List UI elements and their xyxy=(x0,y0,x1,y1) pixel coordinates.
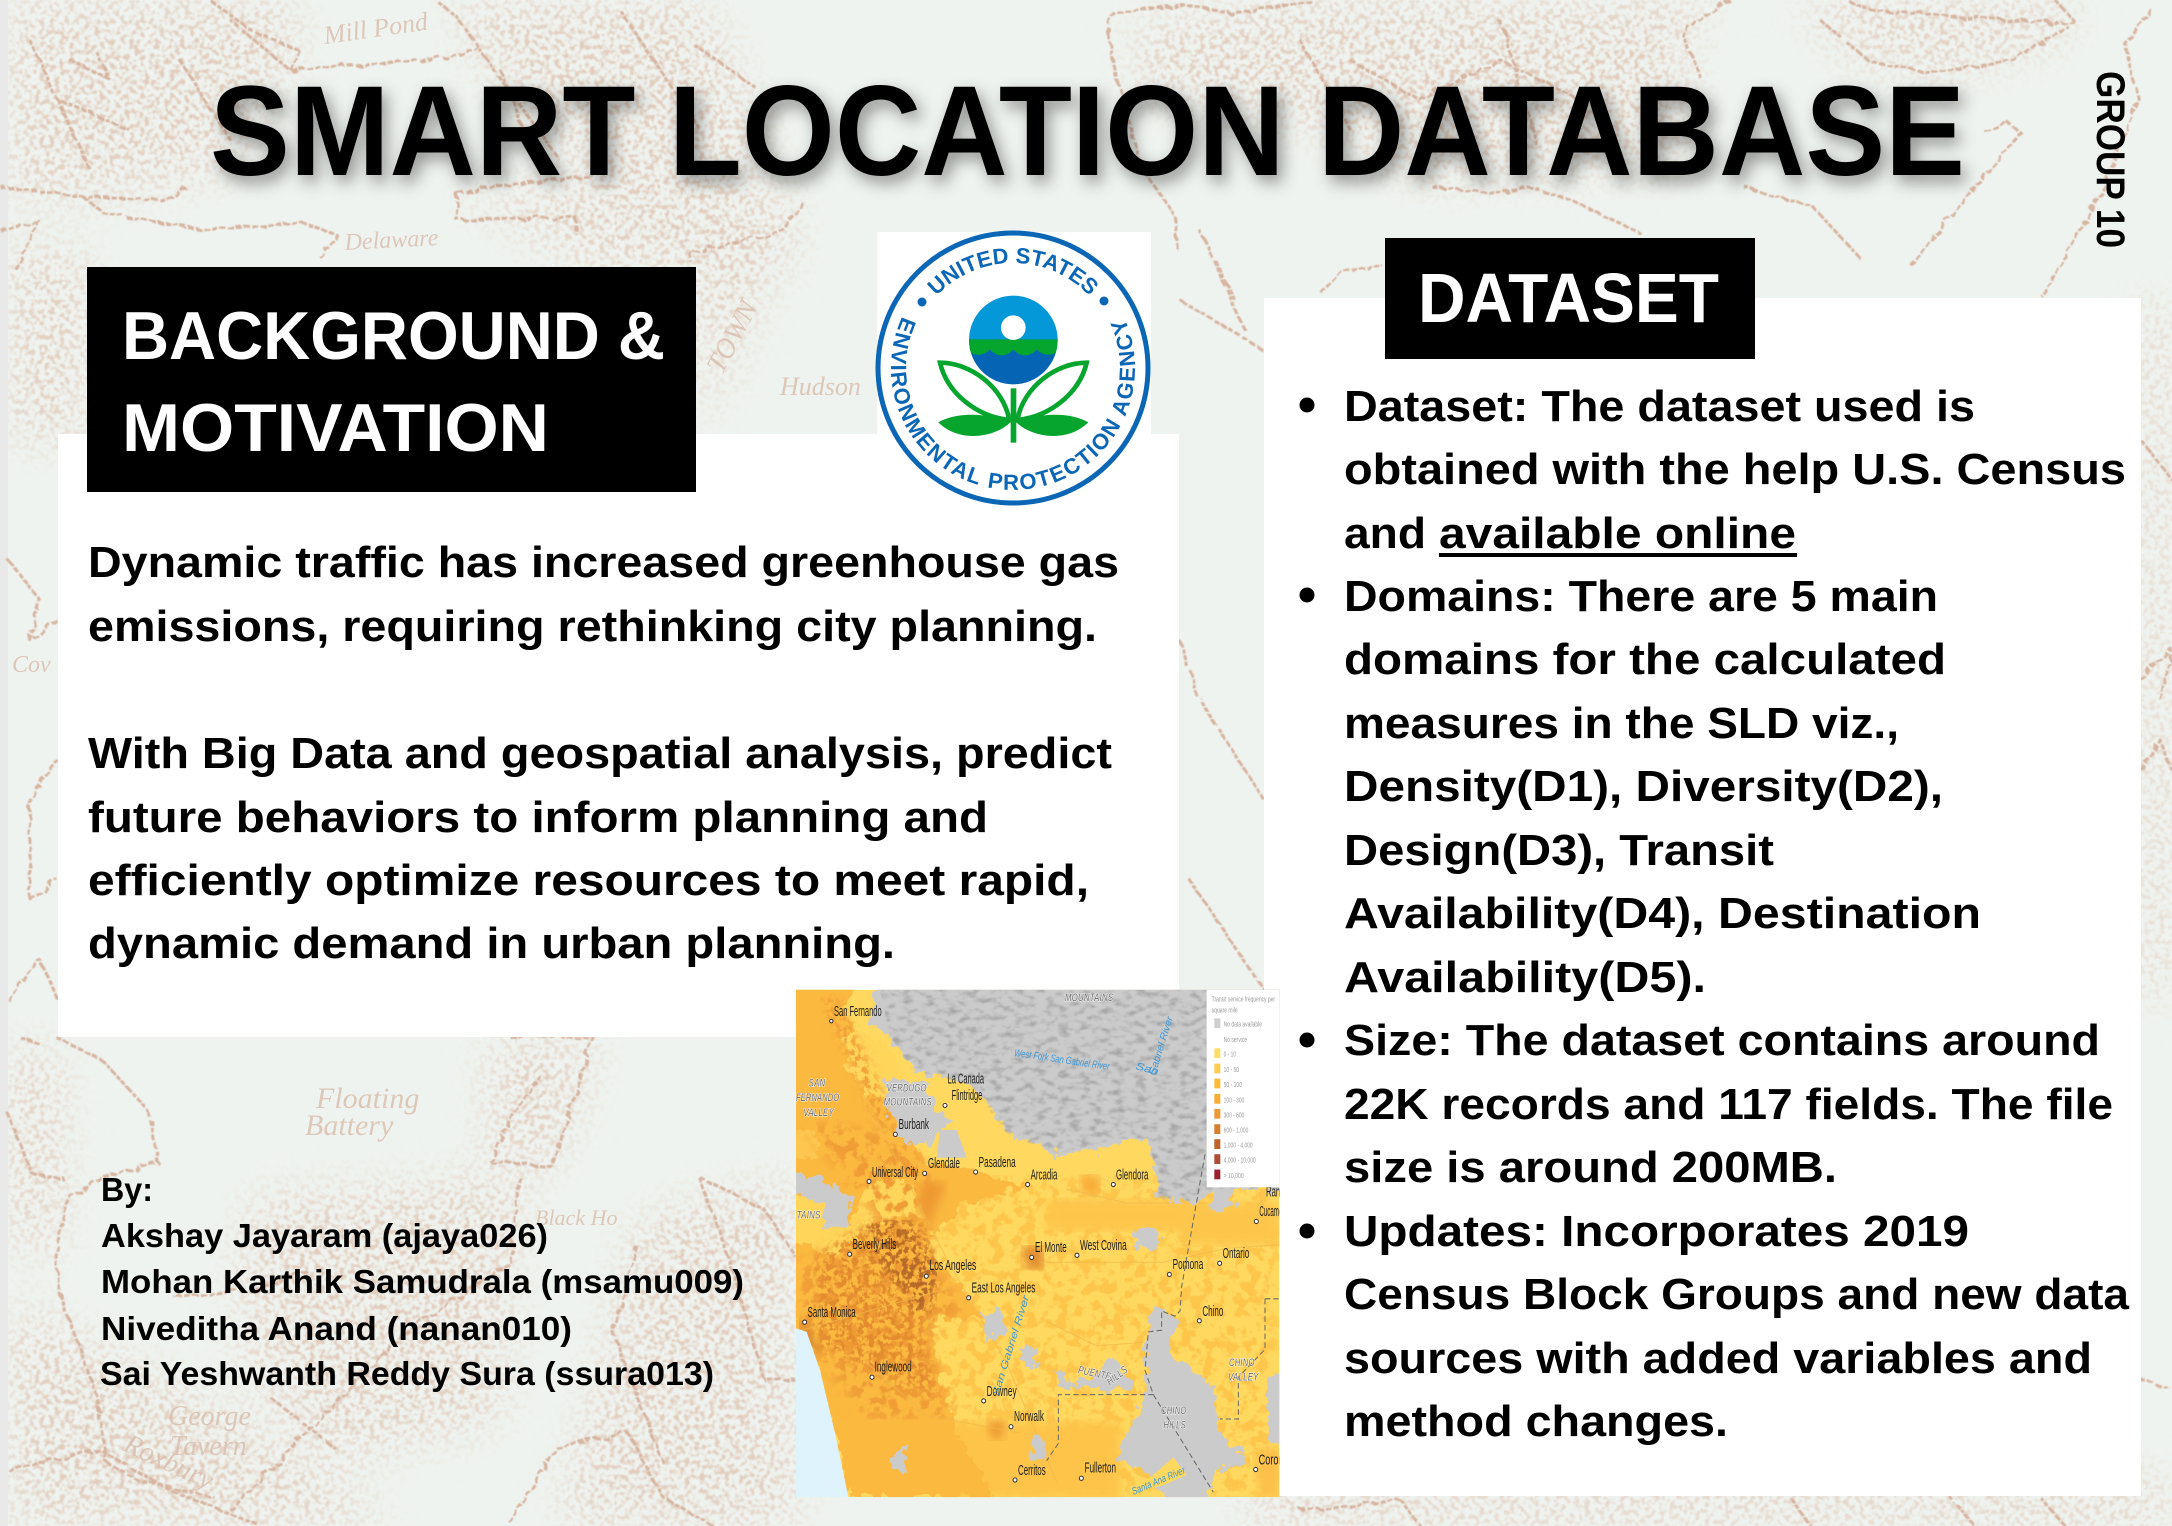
city markers and labels: Norwalk xyxy=(1014,1409,1044,1425)
city markers and labels: Cerritos xyxy=(1018,1463,1046,1479)
text block: background and motivation: efficiently optimize resources to meet rapid, xyxy=(88,856,1089,905)
region labels xyxy=(796,992,1259,1498)
map: transit service frequency in Los Angeles area xyxy=(790,983,1293,1503)
map legend: 4,000 - 10,000 xyxy=(1224,1156,1256,1165)
region labels: CHINO xyxy=(1161,1405,1187,1417)
map legend: Transit service frequency per xyxy=(1212,995,1275,1004)
map legend: 600 - 1,000 xyxy=(1224,1126,1248,1135)
city markers and labels: Arcadia xyxy=(1031,1167,1057,1184)
background: antique map texture: Hudson xyxy=(779,372,861,401)
heading: background and motivation xyxy=(87,267,696,492)
bullet: domains: measures in the SLD viz., xyxy=(1344,699,1899,748)
group label: GROUP 10 xyxy=(2088,71,2132,248)
bullet: dataset source: obtained with the help U.S. Census xyxy=(1344,445,2126,494)
bullet: updates xyxy=(1300,1207,2130,1446)
text block: background and motivation: dynamic demand in urban planning. xyxy=(88,919,895,968)
bullet: domains xyxy=(1300,572,1981,1002)
map legend: 50 - 100 xyxy=(1224,1081,1242,1089)
background: antique map texture: George xyxy=(168,1401,251,1432)
map legend: > 10,000 xyxy=(1224,1172,1244,1180)
bullet: domains: Density(D1), Diversity(D2), xyxy=(1344,762,1943,811)
region labels: FERNANDO xyxy=(796,1092,839,1104)
city markers and labels: El Monte xyxy=(1035,1240,1067,1256)
region labels: CHINO xyxy=(1229,1357,1255,1369)
bullet: updates: Updates: Incorporates 2019 xyxy=(1344,1207,1969,1256)
bullet: domains: Availability(D5). xyxy=(1344,953,1706,1002)
city markers and labels: Pasadena xyxy=(979,1154,1016,1171)
background: antique map texture: Delaware xyxy=(343,225,439,256)
text block: authors: Sai Yeshwanth Reddy Sura (ssura013) xyxy=(100,1355,714,1392)
text block: authors xyxy=(100,1171,744,1392)
region labels: West Fork San Gabriel River xyxy=(1014,1048,1111,1073)
icon: EPA seal xyxy=(876,230,1151,506)
city markers and labels: Glendale xyxy=(928,1156,960,1172)
bullet: dataset source: and xyxy=(1344,509,1426,558)
bullet: size xyxy=(1300,1016,2113,1192)
region labels: HILLS xyxy=(1163,1419,1186,1431)
map legend: 0 - 10 xyxy=(1224,1051,1236,1059)
heading: background and motivation: MOTIVATION xyxy=(122,390,549,466)
west orange base xyxy=(790,987,1027,1497)
bullet: domains: domains for the calculated xyxy=(1344,635,1946,684)
text block: authors: By: xyxy=(101,1171,153,1208)
map legend: 10 - 50 xyxy=(1224,1066,1239,1074)
city markers and labels: Corona xyxy=(1259,1452,1289,1468)
text block: background and motivation: emissions, requiring rethinking city planning. xyxy=(88,602,1097,651)
bullet: updates: Census Block Groups and new data xyxy=(1344,1270,2130,1319)
bullet: size: size is around 200MB. xyxy=(1344,1143,1837,1192)
region labels: VALLEY xyxy=(803,1107,834,1119)
city markers and labels: Burbank xyxy=(899,1117,929,1133)
city markers and labels: Los Angeles xyxy=(929,1258,976,1274)
city markers and labels: Pomona xyxy=(1173,1257,1203,1273)
background: antique map texture: TOWN xyxy=(701,294,765,378)
region labels: San xyxy=(1134,1061,1160,1078)
grey: no data areas xyxy=(790,983,1287,1503)
map legend xyxy=(1207,990,1279,1187)
city markers and labels: West Covina xyxy=(1080,1238,1127,1254)
county lines xyxy=(1047,1154,1279,1492)
background: antique map texture: Mill Pond xyxy=(321,7,431,50)
title: SMART LOCATION DATABASE xyxy=(210,60,1965,203)
city markers and labels: Beverly Hills xyxy=(853,1237,896,1253)
map legend: No data available xyxy=(1224,1021,1262,1029)
heading: dataset: DATASET xyxy=(1418,259,1719,337)
text block: background and motivation xyxy=(88,538,1119,968)
city markers and labels: Chino xyxy=(1202,1304,1223,1320)
text block: background and motivation: With Big Data and geospatial analysis, predict xyxy=(88,729,1112,778)
background: antique map texture: Floating xyxy=(315,1082,419,1115)
bullet: size: Size: The dataset contains around xyxy=(1344,1016,2100,1065)
background: antique map texture: Black Ho xyxy=(535,1205,617,1230)
region labels: VERDUGO xyxy=(887,1082,927,1095)
denser service blotches xyxy=(796,1119,967,1419)
background: antique map texture: Cov xyxy=(12,652,51,678)
east mid tone patches xyxy=(930,1175,1279,1497)
text block: authors: Mohan Karthik Samudrala (msamu009) xyxy=(101,1263,744,1300)
bullet list: dataset facts xyxy=(1300,382,2130,1446)
region labels: VALLEY xyxy=(1228,1371,1259,1384)
bullet: domains: Domains: There are 5 main xyxy=(1344,572,1938,621)
map legend: 300 - 600 xyxy=(1224,1111,1244,1119)
region labels: San Gabriel River xyxy=(991,1294,1032,1397)
text block: authors: Akshay Jayaram (ajaya026) xyxy=(101,1217,548,1254)
region labels: PUENTE xyxy=(1077,1364,1113,1383)
faint roads xyxy=(796,1081,1279,1482)
map legend: square mile xyxy=(1212,1007,1238,1015)
icon: EPA seal: ENVIRONMENTAL PROTECTION AGENCY xyxy=(890,318,1136,490)
yellow hills inside west xyxy=(844,1032,888,1098)
bullet: updates: method changes. xyxy=(1344,1397,1728,1446)
city markers and labels: Santa Monica xyxy=(808,1305,856,1321)
city markers and labels: Fullerton xyxy=(1085,1460,1116,1476)
city markers and labels: Rancho xyxy=(1266,1184,1293,1201)
bullet: domains: Availability(D4), Destination xyxy=(1344,889,1981,938)
text block: background and motivation: future behaviors to inform planning and xyxy=(88,793,988,842)
panel: background and motivation card xyxy=(58,434,1179,1037)
region labels: TAINS xyxy=(797,1209,821,1221)
background: antique map texture: Tavern xyxy=(170,1431,247,1462)
heading: dataset xyxy=(1385,238,1755,359)
panel: dataset card xyxy=(1264,298,2141,1496)
icon: EPA seal: UNITED STATES xyxy=(927,248,1098,294)
text block: background and motivation: Dynamic traffic has increased greenhouse gas xyxy=(88,538,1119,587)
text block: authors: Niveditha Anand (nanan010) xyxy=(101,1310,572,1347)
ocean xyxy=(796,1328,848,1497)
city markers and labels: Inglewood xyxy=(875,1359,912,1376)
map legend: No service xyxy=(1224,1036,1247,1044)
city markers and labels: Downey xyxy=(987,1384,1017,1400)
region labels: SAN xyxy=(809,1077,825,1090)
region labels: HILLS xyxy=(1105,1364,1130,1388)
region labels: MOUNTAINS xyxy=(884,1096,932,1109)
bullet: dataset source: Dataset: The dataset used is xyxy=(1344,382,1975,431)
city markers and labels: Glendora xyxy=(1116,1167,1148,1184)
city markers and labels: Flintridge xyxy=(952,1088,982,1104)
city markers and labels xyxy=(803,1004,1293,1482)
bullet: dataset source: available online xyxy=(1439,509,1796,558)
bullet: dataset source xyxy=(1300,382,2126,558)
city markers and labels: East Los Angeles xyxy=(972,1280,1035,1297)
bullet: size: 22K records and 117 fields. The file xyxy=(1344,1080,2113,1129)
bullet: domains: Design(D3), Transit xyxy=(1344,826,1774,875)
region labels: MOUNTAINS xyxy=(1065,992,1113,1004)
map legend: 1,000 - 4,000 xyxy=(1224,1141,1253,1150)
region labels: Gabriel River xyxy=(1148,1015,1176,1077)
city markers and labels: La Canada xyxy=(948,1071,984,1088)
city markers and labels: Ontario xyxy=(1223,1246,1249,1262)
region labels: Santa Ana River xyxy=(1130,1465,1187,1498)
bullet: updates: sources with added variables and xyxy=(1344,1334,2092,1383)
city markers and labels: Universal City xyxy=(872,1165,918,1181)
background: antique map texture: Roxbury xyxy=(118,1428,219,1497)
background: antique map texture: Battery xyxy=(305,1109,394,1142)
infographic canvas: Cucamonga xyxy=(1259,1204,1293,1220)
map legend: 100 - 300 xyxy=(1224,1096,1244,1104)
heading: background and motivation: BACKGROUND & xyxy=(122,298,665,374)
city markers and labels: San Fernando xyxy=(834,1004,882,1020)
